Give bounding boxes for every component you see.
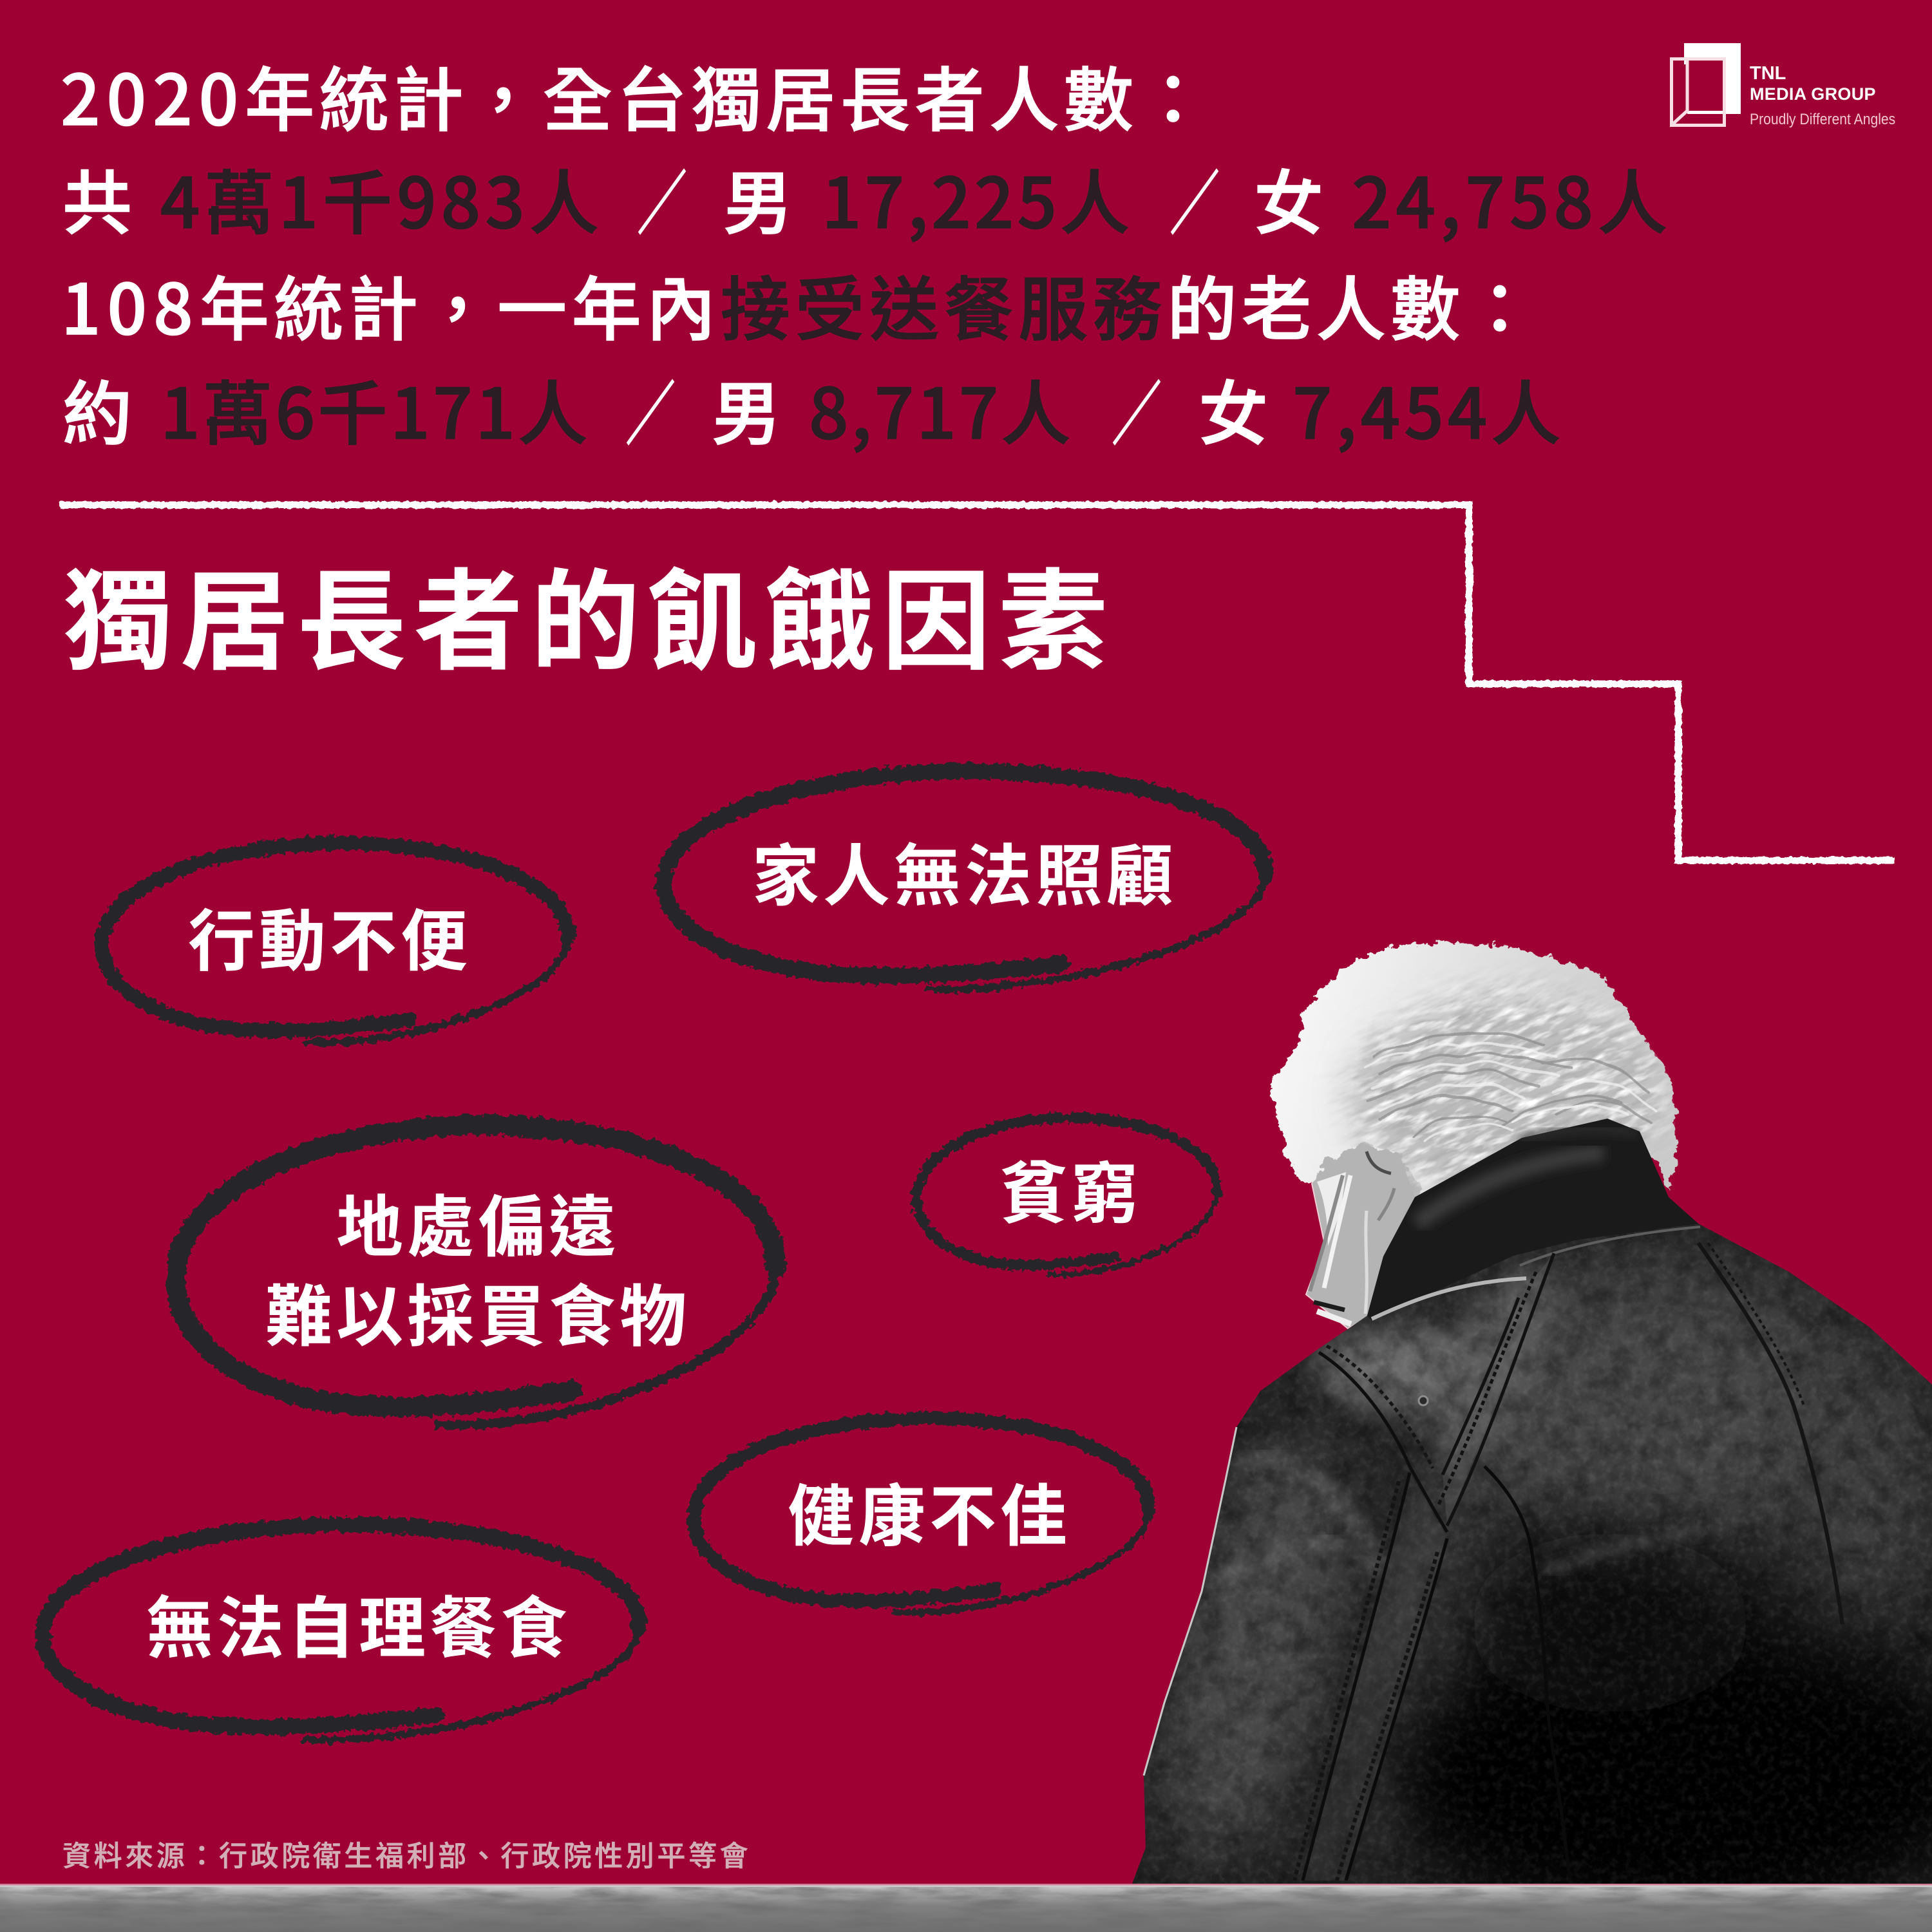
source note: 資料來源：行政院衛生福利部、行政院性別平等會 (62, 1833, 751, 1874)
stats line 1: 2020年統計，全台獨居長者人數： (61, 45, 1213, 146)
bubble label: 健康不佳: 健康不佳 (788, 1462, 1071, 1559)
stats line 4: meal service: 男 (712, 359, 786, 459)
stats line 4: meal service (62, 359, 1564, 459)
bubble label: 地處偏遠 難以採買食物: 地處偏遠 (336, 1173, 620, 1270)
stone ledge (0, 1884, 1932, 1932)
stats line 2: total: ／ (1170, 148, 1223, 249)
stats line 2: total: 24,758人 (1352, 148, 1672, 249)
bubble label: 地處偏遠 難以採買食物: 難以採買食物 (265, 1262, 690, 1359)
stats line 4: meal service: 1萬6千171人 (160, 359, 591, 459)
logo text (1750, 63, 1895, 128)
illustration: elderly man seen from behind (1132, 940, 1932, 1884)
logo text: MEDIA GROUP (1750, 84, 1876, 104)
stats line 2: total: 共 (62, 148, 137, 249)
bubble label: 無法自理餐食: 無法自理餐食 (146, 1574, 571, 1671)
bubble: 無法自理餐食 outline (43, 1524, 639, 1739)
bubble label: 行動不便: 行動不便 (188, 887, 471, 984)
jacket collar (1367, 1119, 1698, 1320)
staircase line (59, 505, 1895, 860)
bubble: 家人無法照顧 outline (663, 771, 1265, 989)
logo text: TNL (1750, 63, 1786, 84)
stats line 2: total: 4萬1千983人 (160, 148, 603, 249)
stats line 2: total: 男 (723, 148, 798, 249)
man's hair (1270, 940, 1680, 1194)
stats line 4: meal service: ／ (1112, 359, 1165, 459)
bubble label: 家人無法照顧: 家人無法照顧 (752, 822, 1177, 919)
man's leather jacket (1132, 1119, 1932, 1884)
stats line 4: meal service: ／ (625, 359, 679, 459)
sleeve rim light (1144, 1427, 1236, 1776)
stats line 3: 108年統計，一年內接受送餐服務的老人數： (61, 254, 1540, 355)
man's face and glasses (1306, 1121, 1436, 1329)
bubble: 地處偏遠 outline (175, 1125, 775, 1425)
stats line 4: meal service: 女 (1198, 359, 1273, 459)
TNL logo mark (1672, 43, 1741, 125)
jacket snap button (1419, 1396, 1428, 1405)
stats line 2: total (62, 148, 1672, 249)
stats line 2: total: ／ (637, 148, 690, 249)
jacket seams (1144, 1243, 1842, 1880)
bubble: 行動不便 outline (102, 843, 567, 1043)
stats line 2: total: 17,225人 (822, 148, 1133, 249)
section heading: 獨居長者的飢餓因素 (63, 533, 1115, 692)
bubble: 貧窮 outline (916, 1117, 1218, 1274)
bubble label: 貧窮: 貧窮 (1000, 1139, 1142, 1236)
logo text: Proudly Different Angles (1750, 111, 1895, 128)
stats line 2: total: 女 (1254, 148, 1329, 249)
stats line 4: meal service: 約 (62, 359, 137, 459)
stats line 4: meal service: 7,454人 (1293, 359, 1564, 459)
bubble: 健康不佳 outline (694, 1418, 1148, 1613)
stats line 4: meal service: 8,717人 (809, 359, 1073, 459)
bubble label: 地處偏遠 難以採買食物 (265, 1173, 690, 1359)
